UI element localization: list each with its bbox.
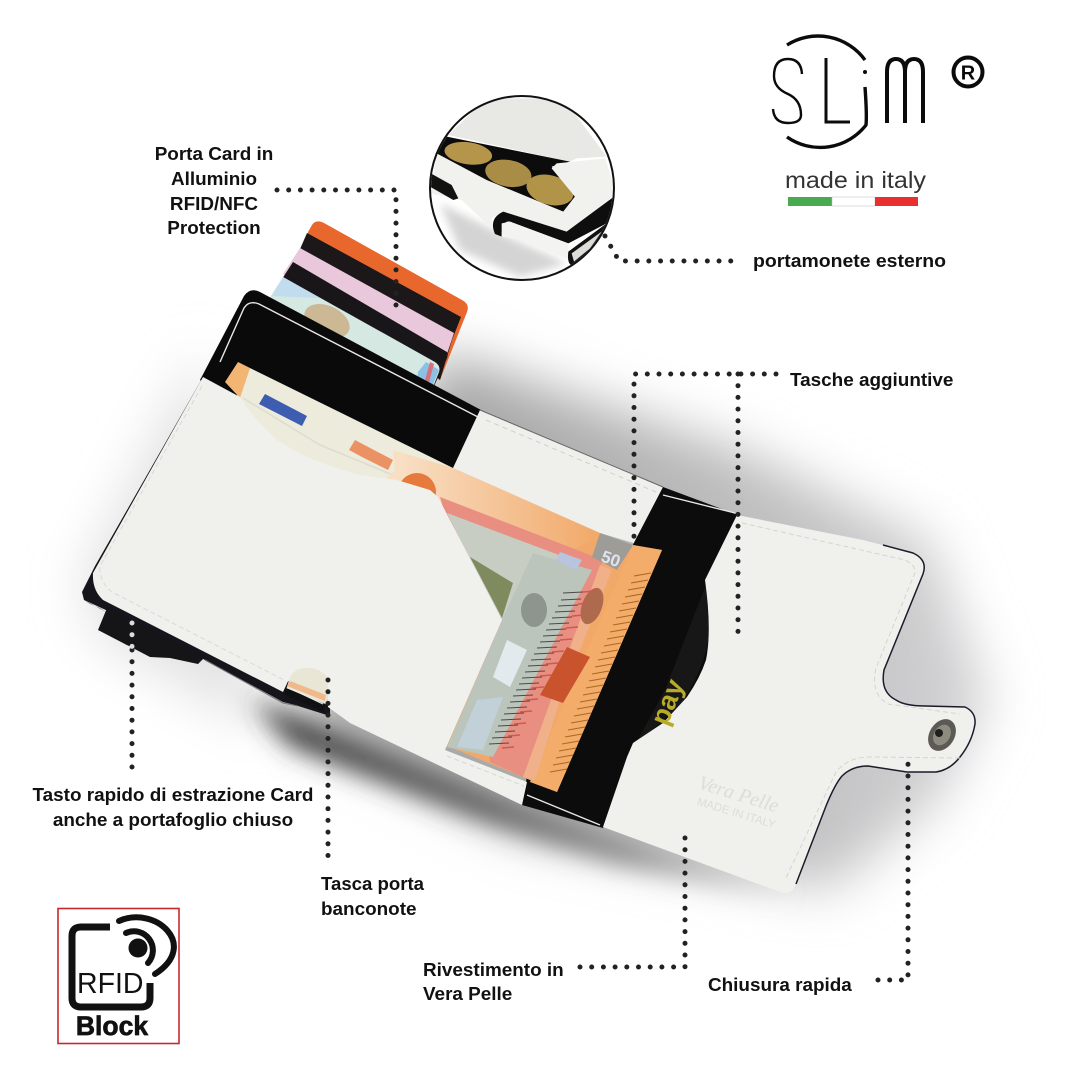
embossed Vera Pelle mark: Vera Pelle [696,772,781,817]
registered mark [954,58,982,86]
label: Rivestimento: Rivestimento in [423,960,564,981]
credit cards fanned out of the holder [268,221,468,400]
dotted leader: Tasche aggiuntive [634,374,776,634]
aluminium card holder edge [82,377,330,716]
label: Tasto rapido [33,785,313,831]
dotted leader: Porta Card [277,190,396,312]
wallet drop shadow [80,350,990,892]
euro banknotes [225,362,662,792]
card: pale blue [268,277,440,400]
red window on note [540,647,590,703]
hologram strip [576,585,608,627]
inset circle: external coin pocket [430,96,617,280]
italian flag bar [788,197,918,206]
label: Tasto rapido: anche a portafoglio chiuso [53,810,293,831]
banknote: grey back layer [447,513,567,625]
dotted leader: Tasca porta banconote [326,680,330,856]
left black band [430,173,458,200]
white front flap (banknote pocket) [93,377,527,805]
label: Porta Card: Alluminio [171,169,257,190]
black inner back panel [200,290,481,470]
banknote: top part behind flap [235,368,600,600]
card outline icon [72,927,150,1007]
lower shadow [440,203,567,277]
quick card ejection button [98,608,205,664]
logo arcs [787,36,866,147]
RFID text: RFID [77,968,144,1000]
made in italy tagline: made in italy [785,167,926,193]
peach upper band [385,450,600,565]
label: Tasca porta banconote: banconote [321,899,417,920]
pay lettering: pay [645,675,690,729]
upper flap [448,98,607,162]
banknote: grey front layer [447,553,592,757]
panel dark edge [796,545,975,884]
flap stitching [100,386,284,680]
50 label panel [592,533,633,570]
label: Porta Card: Porta Card in [155,144,273,165]
label: Rivestimento [423,960,564,1005]
card: dark [282,262,448,395]
white pocket body [430,153,617,233]
50 numeral: 50 [599,547,623,571]
right black band [493,197,614,243]
dotted leader on black button [130,623,134,647]
snap button [922,714,962,756]
RFID Block badge [58,908,179,1044]
dotted leader: Rivestimento [580,834,685,967]
dotted leader: Chiusura rapida [878,755,908,980]
white upper pocket panel [453,410,663,545]
card: orange [300,221,468,380]
label: Porta Card: RFID/NFC [170,194,258,215]
card: black [297,233,461,380]
coins [444,142,492,165]
EU flag [259,394,307,426]
hatch marks on notes [489,592,583,744]
letter S [773,59,802,123]
label: Porta Card: Protection [167,218,261,239]
banknote: middle layer [440,497,603,777]
label: Chiusura rapida: Chiusura rapida [708,975,852,996]
orange note marker [349,440,393,470]
dark slot [437,137,575,212]
label: Tasche aggiuntive: Tasche aggiuntive [790,370,953,391]
stitching on right strip [527,495,735,825]
label: Tasca porta banconote [321,874,424,920]
card: pink [283,248,454,390]
thin outer edge [82,377,330,716]
label: portamonete esterno: portamonete esterno [753,251,946,272]
sun mark [398,473,436,511]
white right panel with closure tab [603,515,975,893]
Block text: Block [76,1011,148,1041]
label: Tasca porta banconote: Tasca porta [321,874,424,895]
inner card in black strip [635,585,710,745]
stitching on black panel [220,303,478,417]
dotted leader: portamonete [605,236,740,261]
banknote: orange 50 front [445,540,662,792]
banknote peeking through notch [286,668,328,705]
embossed Vera Pelle mark: MADE IN ITALY [696,796,777,831]
label: Rivestimento: Vera Pelle [423,984,512,1005]
label: Tasto rapido: Tasto rapido di estrazione Card [33,785,313,806]
black right strip [522,487,738,828]
registered mark: R [961,62,976,84]
letter L [826,58,850,122]
logo: SLIM [773,36,923,147]
signal icon [119,917,174,974]
dotted leader: Tasto rapido [130,650,134,768]
label: Porta Card [155,144,273,239]
strap end [568,223,607,266]
white strap [502,222,570,260]
letter M [887,59,923,123]
